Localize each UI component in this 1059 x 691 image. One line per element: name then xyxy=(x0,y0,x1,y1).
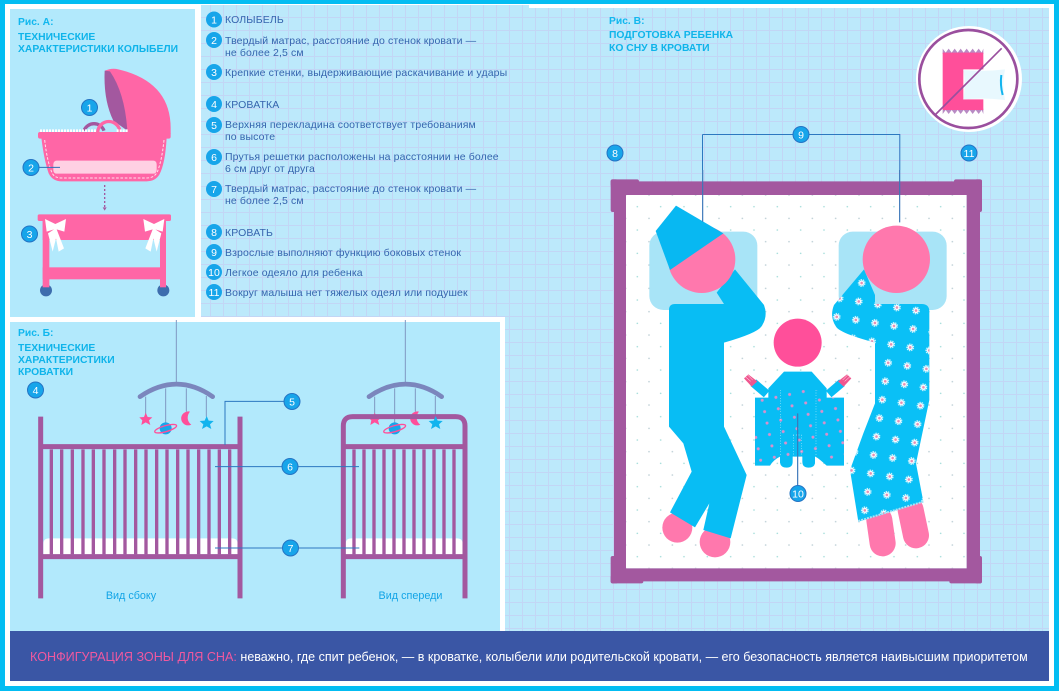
legend item 10 xyxy=(206,264,363,280)
legend item 4: КРОВАТКА xyxy=(225,99,279,111)
crib heading xyxy=(18,328,115,378)
leader lines xyxy=(703,170,900,487)
legend item 5: 5 xyxy=(211,120,217,132)
callout 8 xyxy=(607,145,623,161)
panel: crib xyxy=(10,320,500,631)
legend item 6: 6 см друг от друга xyxy=(225,163,315,175)
legend item 9 xyxy=(206,244,461,260)
legend item 2 xyxy=(206,32,477,59)
cradle heading: Рис. А: xyxy=(18,17,54,28)
callout 6: 6 xyxy=(287,462,293,474)
callout 6 xyxy=(282,458,298,474)
adult figure left xyxy=(649,206,766,557)
cradle heading: ТЕХНИЧЕСКИЕ xyxy=(18,32,95,43)
legend item 9: Взрослые выполняют функцию боковых стенок xyxy=(225,247,461,259)
callout 7: 7 xyxy=(288,543,294,555)
legend item 1: 1 xyxy=(211,14,217,26)
panel: cradle xyxy=(10,9,195,317)
callout 9 xyxy=(793,126,809,142)
legend item 10: 10 xyxy=(208,267,220,279)
caption: side view: Вид сбоку xyxy=(106,590,157,602)
legend item 5: Верхняя перекладина соответствует требованиям xyxy=(225,119,476,131)
heading: bed figure xyxy=(609,16,734,54)
legend item 1 xyxy=(206,12,284,28)
legend item 4: 4 xyxy=(211,99,217,111)
callout 1 xyxy=(82,100,98,116)
legend item 11 xyxy=(206,284,468,300)
side view crib xyxy=(41,417,240,598)
bed xyxy=(611,170,982,583)
crib heading: ТЕХНИЧЕСКИЕ xyxy=(18,343,95,354)
crib drawings xyxy=(41,320,465,598)
cradle heading: ХАРАКТЕРИСТИКИ КОЛЫБЕЛИ xyxy=(18,44,178,55)
callout 3: 3 xyxy=(27,229,33,241)
legend item 5: по высоте xyxy=(225,131,275,143)
callout 2: 2 xyxy=(28,162,34,174)
crib heading: Рис. Б: xyxy=(18,328,53,339)
callout 8: 8 xyxy=(612,148,618,160)
callout 5: 5 xyxy=(289,396,295,408)
mattress xyxy=(626,195,967,568)
callout 7 xyxy=(282,540,298,556)
legend item 9: 9 xyxy=(211,247,217,259)
leader lines xyxy=(215,401,359,548)
side view mobile xyxy=(139,320,214,435)
bed frame xyxy=(614,181,980,581)
heading: bed figure: КО СНУ В КРОВАТИ xyxy=(609,43,710,54)
callout 4: 4 xyxy=(33,385,39,397)
legend item 11: 11 xyxy=(209,287,220,299)
legend item 11: Вокруг малыша нет тяжелых одеял или подушек xyxy=(225,287,468,299)
adult figure right xyxy=(832,226,947,543)
banner: КОНФИГУРАЦИЯ ЗОНЫ ДЛЯ СНА: неважно, где спит ребенок, — в кроватке, колыбели или родительской кровати, — его безопасность является наивысшим приоритетом xyxy=(30,650,1028,664)
callout 11: 11 xyxy=(964,148,975,160)
cradle drawing xyxy=(31,69,171,296)
legend item 7 xyxy=(206,181,477,207)
front view mobile xyxy=(368,320,442,425)
callout 2 xyxy=(23,160,39,176)
legend item 8 xyxy=(206,224,273,240)
heading: bed figure: ПОДГОТОВКА РЕБЕНКА xyxy=(609,30,734,41)
legend item 2: 2 xyxy=(211,35,217,47)
callout 10 xyxy=(790,486,806,502)
legend item 8: КРОВАТЬ xyxy=(225,227,273,239)
callout 1: 1 xyxy=(87,102,93,114)
callout 11 xyxy=(961,145,977,161)
legend item 6 xyxy=(206,149,499,175)
legend item 6: 6 xyxy=(211,152,217,164)
legend item 10: Легкое одеяло для ребенка xyxy=(225,267,363,279)
banner xyxy=(10,631,1049,681)
callout 3 xyxy=(22,226,38,242)
legend item 3: 3 xyxy=(211,67,217,79)
legend item 7: Твердый матрас, расстояние до стенок кровати — xyxy=(225,183,477,195)
legend item 7: 7 xyxy=(211,184,217,196)
crib heading: КРОВАТКИ xyxy=(18,367,73,378)
callout 4 xyxy=(28,382,44,398)
legend item 1: КОЛЫБЕЛЬ xyxy=(225,14,284,26)
caption: front view: Вид спереди xyxy=(379,590,442,602)
leader line 9 xyxy=(702,134,900,170)
legend item 3: Крепкие стенки, выдерживающие раскачивание и удары xyxy=(225,67,507,79)
heading: bed figure: Рис. В: xyxy=(609,16,645,27)
callout 10: 10 xyxy=(792,488,804,500)
legend item 5 xyxy=(206,117,476,143)
icon: no heavy blanket or pillow xyxy=(916,26,1022,132)
legend item 7: не более 2,5 см xyxy=(225,195,304,207)
callout 9: 9 xyxy=(798,130,804,142)
crib heading: ХАРАКТЕРИСТИКИ xyxy=(18,355,115,366)
cradle heading xyxy=(18,17,178,55)
legend item 8: 8 xyxy=(211,227,217,239)
baby figure xyxy=(744,319,851,468)
panel: grid background with list and bed xyxy=(201,5,1049,631)
legend item 2: не более 2,5 см xyxy=(225,47,304,59)
front view crib xyxy=(343,416,465,598)
bed corners xyxy=(611,179,982,583)
legend item 4 xyxy=(206,96,279,112)
legend item 6: Прутья решетки расположены на расстоянии не более xyxy=(225,151,499,163)
callout 5 xyxy=(284,394,300,410)
panel: legend list xyxy=(206,12,507,300)
legend item 2: Твердый матрас, расстояние до стенок кровати — xyxy=(225,35,477,47)
